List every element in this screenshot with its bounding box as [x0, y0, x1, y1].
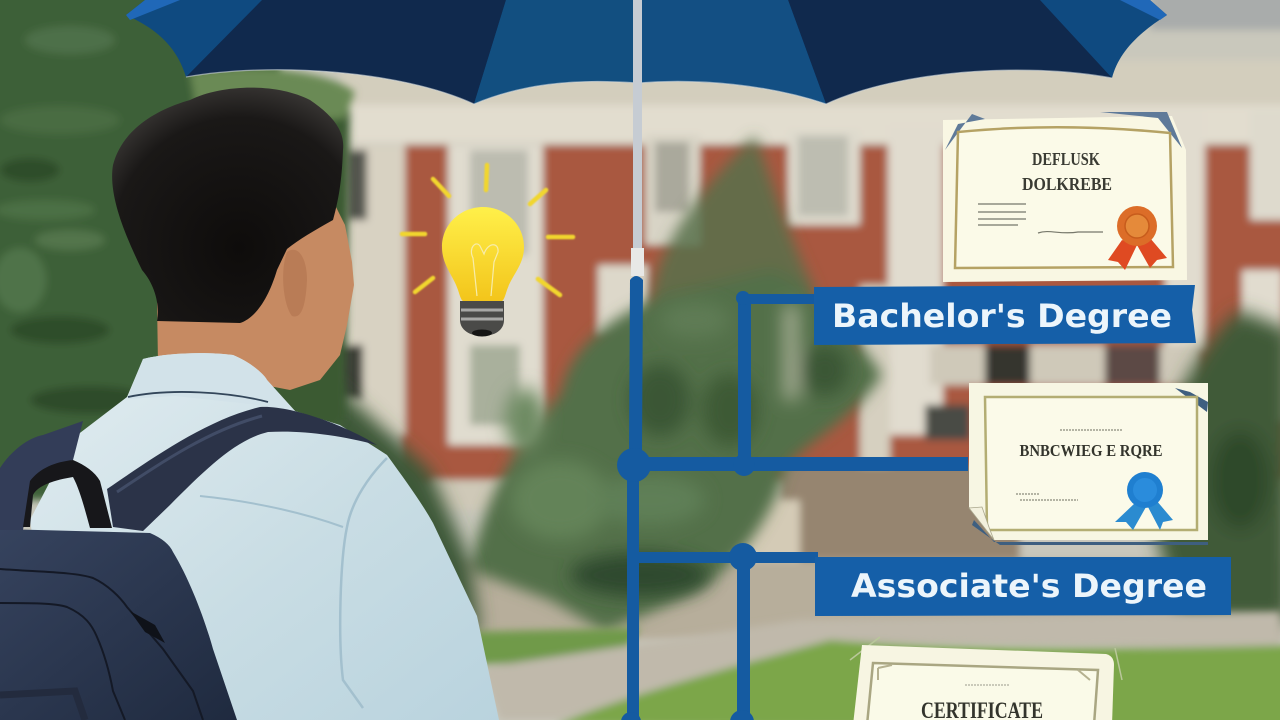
umbrella canopy: [126, 0, 1167, 104]
certificate: certificate: [850, 637, 1122, 720]
shirt body: [30, 353, 499, 720]
backpack rear strap: [0, 421, 83, 530]
certificate: bachelor: DOLKREBE: [1022, 174, 1112, 194]
label: Associate's Degree: Associate's Degree: [851, 567, 1207, 605]
black loop handle: [23, 460, 112, 528]
certificate: bachelor: [943, 112, 1187, 282]
ear: [283, 250, 307, 317]
collar: [127, 353, 295, 411]
certificate text: BNBCWIEG E RQRE: [1020, 441, 1162, 460]
certificate: associate: [969, 383, 1208, 545]
label: Bachelor's Degree: [814, 285, 1196, 345]
backpack body: [0, 529, 237, 720]
rays: [402, 165, 573, 295]
icon: light bulb: [402, 165, 573, 336]
red ribbon seal: [1108, 238, 1167, 270]
zipper pull: [130, 611, 165, 643]
label: Bachelor's Degree: Bachelor's Degree: [832, 297, 1172, 335]
blurred trees and lawn: [470, 135, 882, 632]
shirt seams: [340, 458, 387, 708]
umbrella shaft: [631, 0, 644, 276]
neck and face: [157, 205, 354, 390]
bulb base: [460, 301, 504, 336]
flowchart connector lines: [617, 276, 968, 720]
backpack zippers: [0, 569, 203, 720]
person with backpack: [0, 88, 499, 720]
label: Associate's Degree: [815, 557, 1231, 616]
hair: [112, 88, 343, 323]
backpack front strap: [107, 407, 377, 531]
certificate text: DEFLUSK: [1032, 149, 1100, 169]
bulb glass: [442, 207, 524, 301]
blue ribbon seal: [1115, 500, 1173, 530]
